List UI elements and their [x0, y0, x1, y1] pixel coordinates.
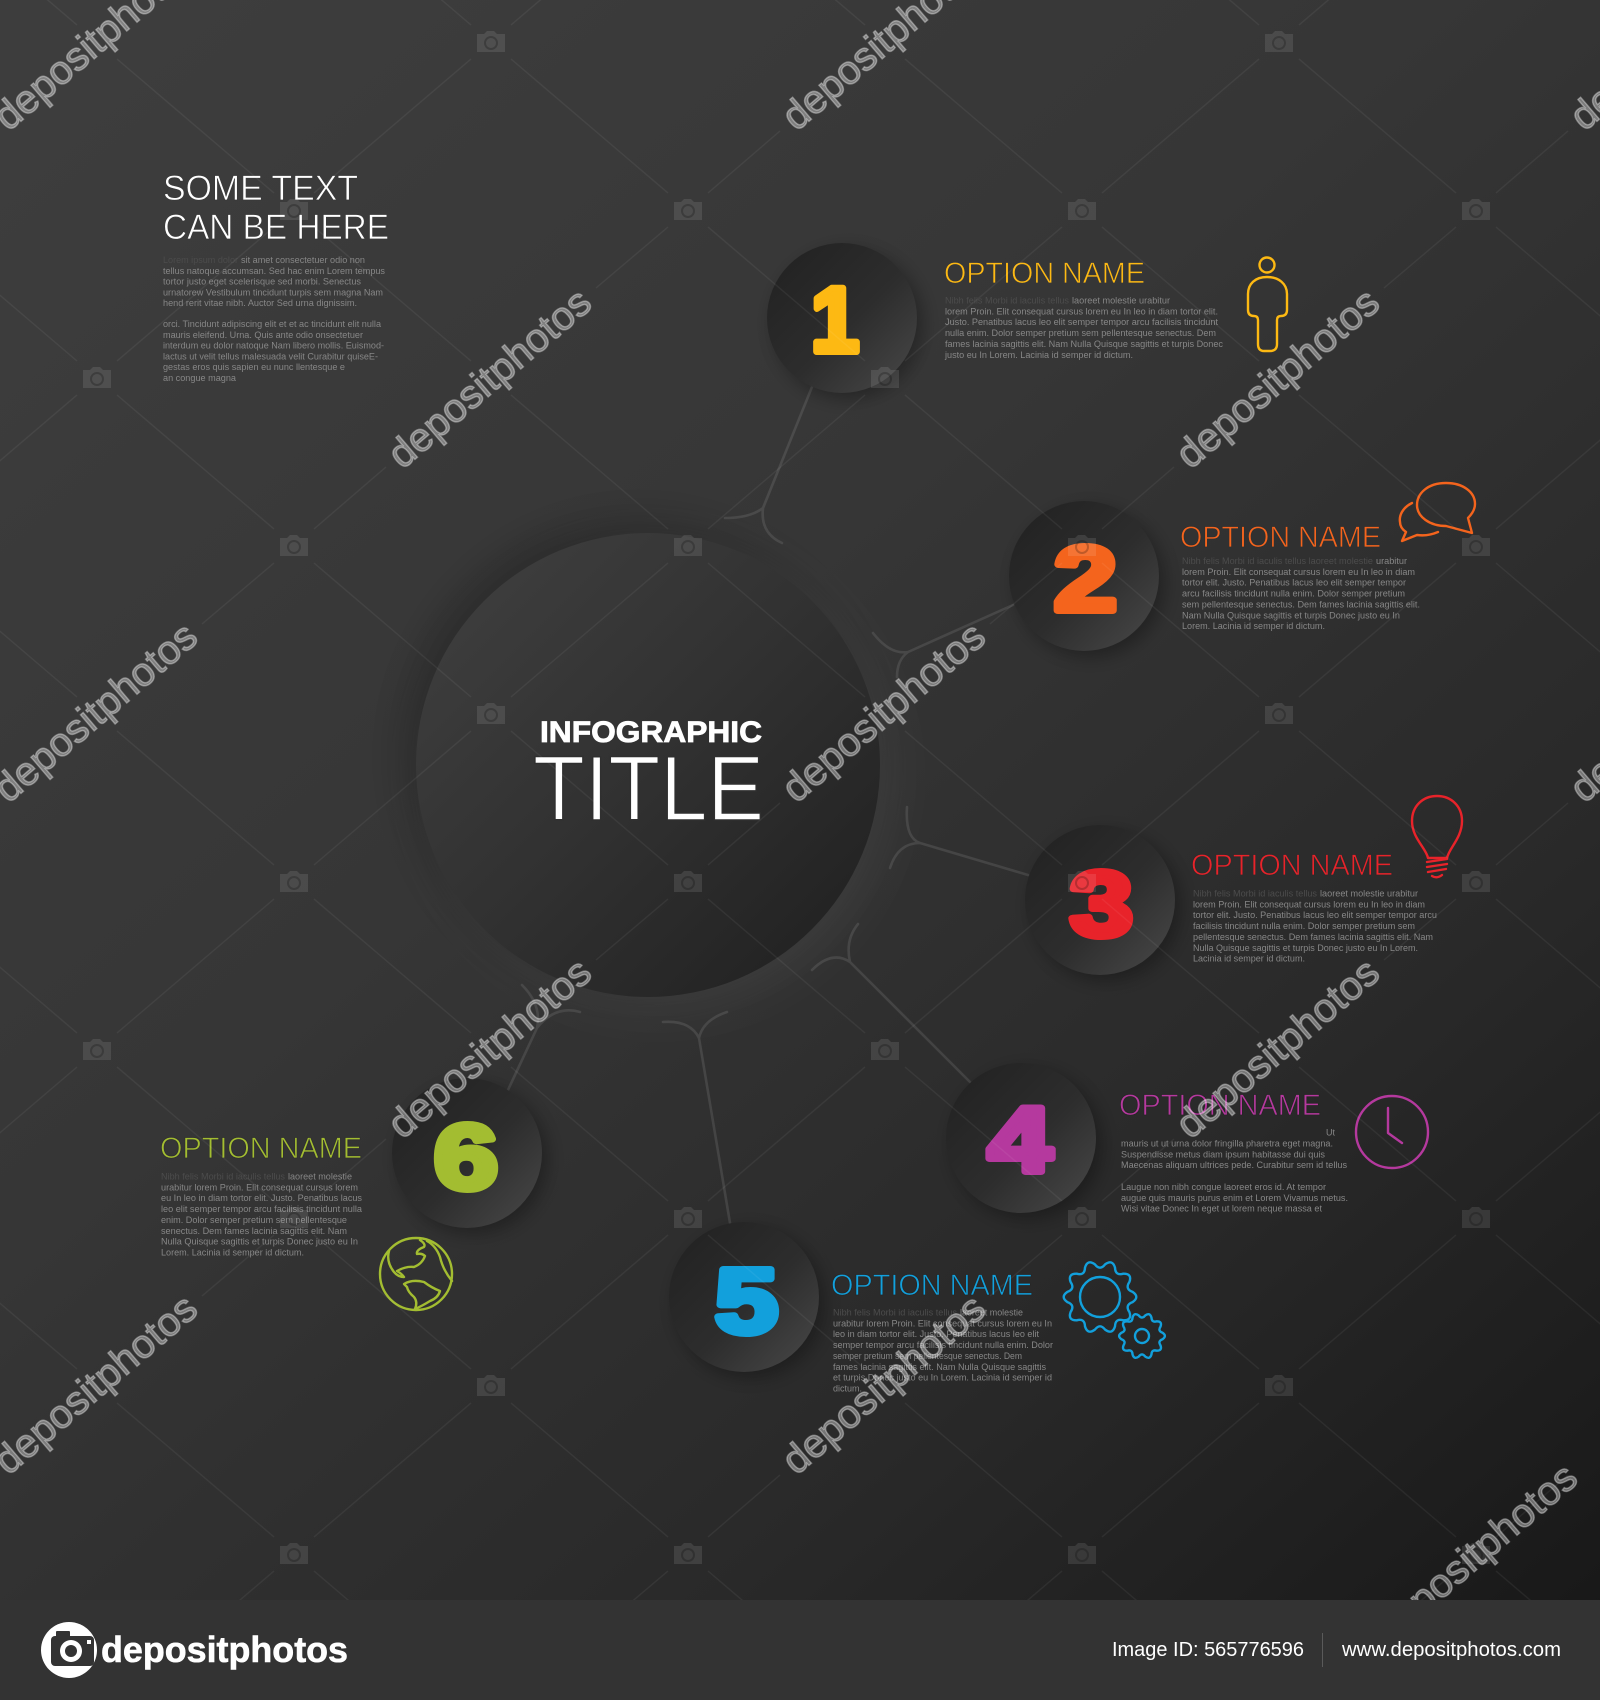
option 1 text [944, 296, 1223, 361]
option 3 text: lorem Proin. Elit consequat cursus lorem eu In leo in diam [1193, 899, 1425, 910]
option 6 text: Nibh felis Morbi id iaculis tellus [161, 1172, 285, 1182]
option 2 text: sem pellentesque senectus. Dem fames lacinia sagittis elit. [1182, 599, 1420, 610]
number circle 4 [946, 1063, 1102, 1219]
option 6 text: Nulla Quisque sagittis et turpis Donec justo eu In [161, 1237, 358, 1248]
option 2 text: Nam Nulla Quisque sagittis et turpis Donec justo eu In [1182, 610, 1400, 621]
option 2 heading: OPTION NAME [1180, 521, 1381, 554]
option 3 text: Lacinia id semper id dictum. [1193, 954, 1305, 965]
number circle 5 [669, 1222, 825, 1378]
option 5 text: semper tempor arcu facilisis tincidunt nulla enim. Dolor [833, 1340, 1054, 1351]
icon: globe [380, 1238, 452, 1310]
option 1 text: laoreet molestie urabitur [1072, 296, 1171, 306]
option 6 text: enim. Dolor semper pretium sem pellentesque [161, 1215, 347, 1226]
infographic title: TITLE [533, 738, 764, 840]
intro text block: an congue magna [163, 373, 237, 384]
intro text block [163, 169, 389, 384]
option 4 text: augue quis mauris purus enim et Lorem Vivamus metus. [1121, 1193, 1348, 1204]
icon: person [1248, 258, 1287, 351]
footer logo [41, 1622, 348, 1678]
intro text block: SOME TEXT [163, 169, 358, 208]
intro text block: orci. Tincidunt adipiscing elit et et ac tincidunt elit nulla [163, 319, 382, 330]
option 6 text: Lorem. Lacinia id semper id dictum. [161, 1248, 304, 1258]
option 3 text: Nibh felis Morbi id iaculis tellus [1193, 888, 1317, 900]
watermark texts: depositphotos [1366, 1455, 1586, 1652]
number circle 1 [767, 243, 923, 399]
watermark texts: depositphotos [774, 614, 994, 811]
option 5 text: et turpis Donec justo eu In Lorem. Lacinia id semper id [833, 1373, 1052, 1384]
option 6 text: eu In leo in diam tortor elit. Justo. Penatibus lacus [161, 1193, 362, 1204]
option 2 text: Lorem. Lacinia id semper id dictum. [1182, 621, 1325, 632]
option 6 heading: OPTION NAME [160, 1132, 362, 1165]
option 2 text: arcu facilisis tincidunt nulla enim. Dolor semper pretium [1182, 589, 1405, 600]
option 6 text: senectus. Dem fames lacinia sagittis elit. Nam [161, 1226, 347, 1237]
icon: clock [1356, 1096, 1428, 1168]
option 5 heading: OPTION NAME [831, 1269, 1033, 1302]
intro text block: gestas eros quis sapien eu nunc llentesque e [163, 362, 345, 373]
option 4 text: Wisi vitae Donec In eget ut lorem neque massa et [1121, 1204, 1322, 1215]
option 1 heading: OPTION NAME [944, 257, 1145, 290]
option 3 heading: OPTION NAME [1191, 849, 1393, 882]
option 2 text [1182, 556, 1420, 632]
intro text block: interdum eu dolor natoque Nam libero mollis. Euismod- [163, 341, 384, 352]
option 5 text: laoreet molestie [960, 1308, 1023, 1318]
option 1 text: justo eu In Lorem. Lacinia id semper id dictum. [944, 350, 1133, 361]
option 2 text: lorem Proin. Elit consequat cursus lorem eu In leo in diam [1182, 567, 1415, 578]
option 4 text: Laugue non nibh congue laoreet eros id. At tempor [1121, 1182, 1327, 1193]
option 6 text: leo elit semper tempor arcu facilisis tincidunt nulla [161, 1204, 363, 1215]
option 1 text: Nibh felis Morbi id iaculis tellus [945, 296, 1069, 306]
option 4 heading: OPTION NAME [1119, 1089, 1321, 1122]
connector lines [508, 387, 1028, 1223]
option 2 text: urabitur [1376, 556, 1408, 567]
option 1 text: lorem Proin. Elit consequat cursus lorem eu In leo in diam tortor elit. [945, 306, 1218, 317]
option 4 text: mauris ut ut urna dolor fringilla pharetra eget magna. [1121, 1138, 1333, 1150]
option 5 text: semper pretium sem pellentesque senectus. Dem [833, 1351, 1022, 1362]
option 5 text: urabitur lorem Proin. Elit consequat cursus lorem eu In [833, 1318, 1052, 1329]
option 6 text: urabitur lorem Proin. Elit consequat cursus lorem [161, 1182, 358, 1193]
option 4 text: Ut [1326, 1128, 1335, 1138]
intro text block: CAN BE HERE [163, 208, 389, 247]
option 5 text: Nibh felis Morbi id iaculis tellus [833, 1308, 957, 1318]
icon: gears [1064, 1262, 1165, 1358]
option 1 text: fames lacinia sagittis elit. Nam Nulla Quisque sagittis et turpis Donec [945, 339, 1223, 350]
option 5 [669, 1222, 1165, 1394]
option 5 text: fames lacinia sagittis elit. Nam Nulla Quisque sagittis [833, 1362, 1046, 1373]
option 5 text: leo in diam tortor elit. Justo. Penatibus lacus leo elit [833, 1329, 1039, 1340]
intro text block: tellus natoque accumsan. Sed hac enim Lorem tempus [163, 266, 385, 277]
infographic title: INFOGRAPHIC [540, 716, 762, 749]
option 4 text [1121, 1128, 1348, 1215]
option 6 text [161, 1172, 363, 1258]
option 4 text: Maecenas aliquam ultrices pede. Curabitur sem id tellus [1121, 1160, 1347, 1171]
option 6 [160, 1078, 548, 1310]
option 2 text: Nibh felis Morbi id iaculis tellus laoreet molestie [1182, 556, 1373, 567]
intro text block: mauris eleifend. Urna. Quis ante odio onsectetuer [163, 330, 364, 341]
option 1 text: Justo. Penatibus lacus leo elit semper tempor arcu facilisis tincidunt [945, 317, 1218, 328]
option 5 text [833, 1308, 1054, 1394]
option 3 text: facilisis tincidunt nulla enim. Dolor semper pretium sem [1193, 921, 1415, 932]
watermark texts: depositphotos [1168, 950, 1388, 1147]
number circle 5: 5 [715, 1250, 778, 1352]
number circle 6 [392, 1078, 548, 1234]
option 3 text: tortor elit. Justo. Penatibus lacus leo elit semper tempor arcu [1193, 910, 1437, 921]
watermark texts: depositphotos [380, 950, 600, 1147]
image id: Image ID: 565776596 [1112, 1639, 1304, 1661]
number circle 6: 6 [434, 1106, 498, 1208]
option 4 text: Suspendisse metus diam ipsum habitasse dui quis [1121, 1149, 1325, 1160]
intro text block: tortor justo eget scelerisque sed morbi. Senectus [163, 277, 361, 288]
option 2 text: tortor elit. Justo. Penatibus lacus leo elit semper tempor [1182, 578, 1407, 589]
number circle 3 [1025, 825, 1181, 981]
intro text block: Lorem ipsum dolor [163, 255, 239, 266]
icon: speech bubbles [1400, 483, 1475, 541]
option 3 text: pellentesque senectus. Dem fames lacinia sagittis elit. Nam [1193, 932, 1433, 943]
option 3 text: Nulla Quisque sagittis et turpis Donec justo eu In Lorem. [1193, 943, 1418, 954]
number circle 2 [1009, 501, 1165, 657]
website: www.depositphotos.com [1341, 1639, 1561, 1661]
option 6 text: laoreet molestie [288, 1172, 352, 1182]
option 4 [946, 1063, 1428, 1219]
number circle 2: 2 [1054, 528, 1117, 630]
number circle 3: 3 [1070, 854, 1133, 956]
number circle 1: 1 [811, 270, 859, 372]
watermark texts: depositphotos [1168, 280, 1388, 477]
option 3 text [1193, 888, 1437, 965]
option 1 text: nulla enim. Dolor semper pretium sem pellentesque senectus. Dem [945, 328, 1216, 339]
central circle [406, 523, 890, 1007]
intro text block: sit amet consectetuer odio non [241, 255, 365, 266]
option 2 [1009, 483, 1475, 657]
watermark texts: depositphotos [380, 280, 600, 477]
option 3 text: laoreet molestie urabitur [1320, 888, 1419, 900]
intro text block: hend rerit vitae nibh. Auctor Sed urna dignissim. [163, 298, 357, 309]
option 1 [767, 243, 1287, 399]
option 3 [1025, 796, 1462, 981]
watermark texts: depositphotos [774, 1286, 994, 1483]
number circle 4: 4 [988, 1090, 1052, 1192]
footer bar [0, 1600, 1600, 1700]
intro text block: urnatorew Vestibulum tincidunt turpis sem magna Nam [163, 287, 383, 298]
option 5 text: dictum. [833, 1384, 862, 1394]
footer logo: depositphotos [101, 1629, 348, 1670]
icon: light bulb [1412, 796, 1462, 877]
intro text block: lactus ut velit tellus malesuada velit Curabitur quiseE- [163, 351, 378, 362]
